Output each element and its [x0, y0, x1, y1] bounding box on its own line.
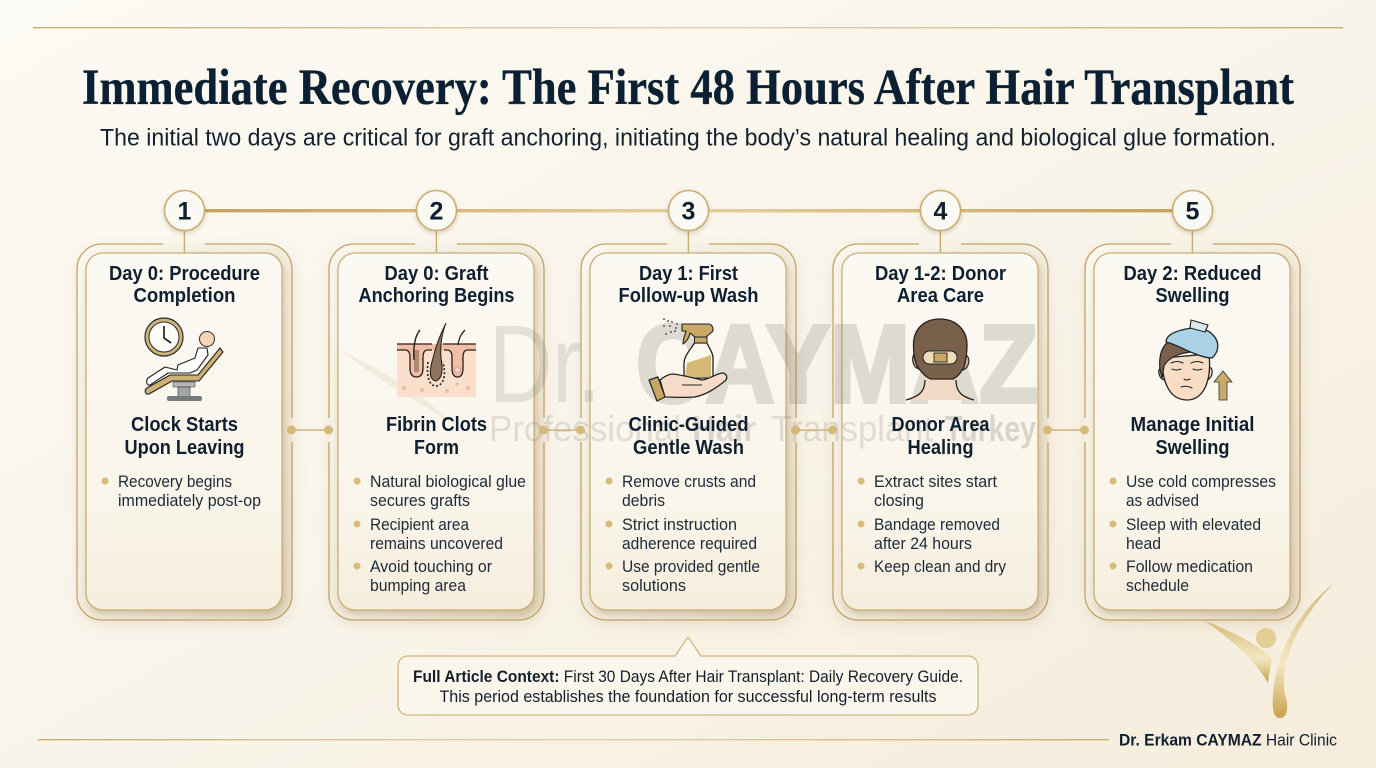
panel: card 1 shell [77, 244, 292, 620]
bottom rule [38, 739, 1109, 740]
card 2 content [354, 263, 526, 595]
icon: clock and reclining patient [145, 318, 223, 401]
card 2 heading: Day 0: Graft [384, 263, 489, 285]
connector 3 to 4 [791, 426, 837, 434]
watermark: Transplant [771, 408, 933, 449]
card 1 heading: Completion [134, 285, 236, 307]
step marker 2: 2 [430, 198, 443, 226]
step marker 3 [668, 190, 708, 253]
connector 4 to 5 [1043, 426, 1089, 434]
callout: article context [398, 637, 978, 715]
card 5 bullet list: Sleep with elevated [1126, 516, 1261, 534]
card 3 subheading: Gentle Wash [633, 437, 744, 459]
card 4 bullet list: closing [874, 492, 924, 510]
card 5 subheading [1130, 414, 1254, 459]
watermark [340, 303, 1038, 449]
card 4 subheading [892, 414, 990, 459]
card 5 bullet list: Use cold compresses [1126, 473, 1276, 491]
connector 1 to 2 [287, 426, 333, 434]
card 3 subheading [628, 414, 748, 459]
card 4 subheading: Donor Area [892, 414, 990, 436]
step marker 5 [1172, 190, 1212, 253]
card 3 heading: Day 1: First [639, 263, 738, 285]
card 5 heading: Day 2: Reduced [1124, 263, 1262, 285]
card 2 bullet list: remains uncovered [370, 535, 503, 553]
card 4 heading: Day 1-2: Donor [875, 263, 1006, 285]
card 1 subheading [124, 414, 244, 459]
card 4 bullet list: Extract sites start [874, 473, 997, 491]
watermark: Professional [489, 408, 681, 449]
step marker 3: 3 [682, 198, 695, 226]
panel: card 4 shell [833, 244, 1048, 620]
card 5 subheading: Swelling [1156, 437, 1230, 459]
card 5 heading [1124, 263, 1262, 307]
card 4 bullet list [858, 473, 1007, 576]
card 1 bullet list: Recovery begins [118, 473, 232, 491]
watermark: Hair [692, 408, 756, 449]
card 3 bullet list: adherence required [622, 535, 757, 553]
card 2 bullet list: Natural biological glue [370, 473, 526, 491]
card 3 content [606, 263, 760, 595]
watermark: Dr. [489, 303, 601, 426]
card 5 bullet list: schedule [1126, 577, 1189, 595]
card 3 bullet list: Remove crusts and [622, 473, 756, 491]
card 5 subheading: Manage Initial [1130, 414, 1254, 436]
card 1 bullet list: immediately post-op [118, 492, 261, 510]
watermark: CAYMAZ [636, 303, 1038, 426]
card 4 heading: Area Care [897, 285, 984, 307]
card 5 content [1110, 263, 1276, 595]
card 2 heading [358, 263, 514, 307]
card 3 bullet list: Use provided gentle [622, 558, 760, 576]
card 3 bullet list: debris [622, 492, 665, 510]
card 2 bullet list: secures grafts [370, 492, 470, 510]
card 1 subheading: Clock Starts [131, 414, 238, 436]
icon: back of head with bandage [906, 319, 974, 400]
panel: card 5 shell [1085, 244, 1300, 620]
icon: ice pack on swollen face [1159, 320, 1232, 400]
step marker 5: 5 [1186, 198, 1200, 226]
card 2 bullet list: Recipient area [370, 516, 470, 534]
callout: article context: This period establishes the foundation for successful long-term results [440, 688, 936, 706]
card 2 bullet list: bumping area [370, 577, 467, 595]
card 3 heading [618, 263, 758, 307]
icon: hair follicle in skin [397, 323, 476, 397]
card 3 bullet list: Strict instruction [622, 516, 737, 534]
card 1 bullet list [102, 473, 261, 510]
card 4 bullet list: Keep clean and dry [874, 558, 1007, 576]
card 2 subheading: Fibrin Clots [386, 414, 487, 436]
card 1 subheading: Upon Leaving [124, 437, 244, 459]
card 5 bullet list: Follow medication [1126, 558, 1253, 576]
card 1 content [102, 263, 261, 510]
timeline connector line [204, 209, 1172, 212]
card 4 content [858, 263, 1007, 576]
card 5 heading: Swelling [1156, 285, 1230, 307]
card 2 heading: Anchoring Begins [358, 285, 514, 307]
step marker 4: 4 [934, 198, 948, 226]
card 1 heading [109, 263, 260, 307]
card 3 bullet list [606, 473, 760, 595]
card 2 bullet list [354, 473, 526, 595]
card 2 subheading: Form [414, 437, 459, 459]
step marker 2 [416, 190, 456, 253]
card 2 bullet list: Avoid touching or [370, 558, 492, 576]
card 2 subheading [386, 414, 487, 459]
panel: card 3 shell [581, 244, 796, 620]
subtitle: The initial two days are critical for graft anchoring, initiating the body’s natural healing and biological glue formation. [100, 124, 1276, 152]
card 5 bullet list: as advised [1126, 492, 1199, 510]
card 4 heading [875, 263, 1006, 307]
connector 2 to 3 [539, 426, 585, 434]
card 4 bullet list: after 24 hours [874, 535, 972, 553]
icon: spray bottle over hand [649, 318, 727, 401]
card 4 bullet list: Bandage removed [874, 516, 1000, 534]
card 3 heading: Follow-up Wash [618, 285, 758, 307]
footer brand: Dr. Erkam CAYMAZ Hair Clinic [1119, 730, 1337, 750]
watermark: Turkey [945, 408, 1036, 449]
card 5 bullet list [1110, 473, 1276, 595]
card 4 subheading: Healing [908, 437, 974, 459]
step marker 1 [164, 190, 204, 253]
card 3 subheading: Clinic-Guided [628, 414, 748, 436]
step marker 4 [920, 190, 960, 253]
callout: article context: Full Article Context: First 30 Days After Hair Transplant: Daily Recovery Guide. [413, 668, 963, 686]
card 3 bullet list: solutions [622, 577, 686, 595]
logo: gold figure mark [1205, 584, 1333, 718]
card 1 heading: Day 0: Procedure [109, 263, 260, 285]
step marker 1: 1 [178, 198, 192, 226]
panel: card 2 shell [329, 244, 544, 620]
card 5 bullet list: head [1126, 535, 1161, 553]
